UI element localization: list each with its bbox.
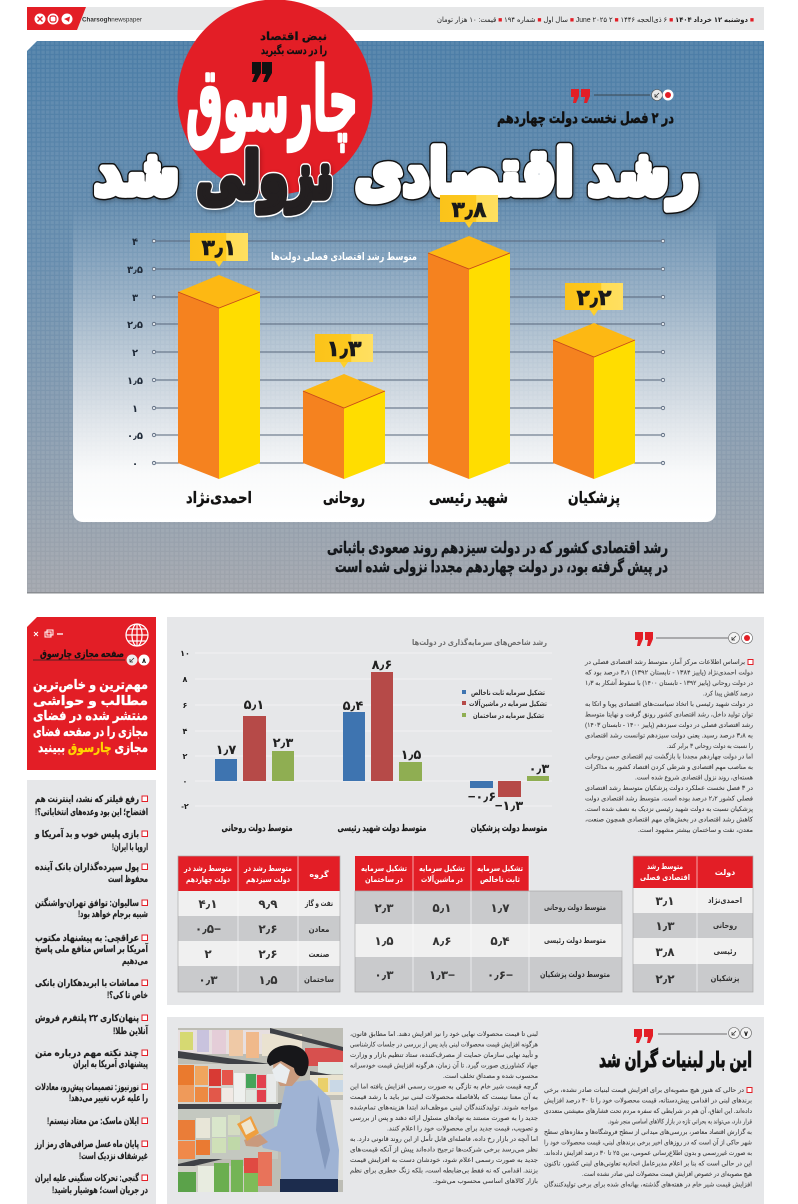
legend: تشکیل سرمایه در ساختمان (473, 712, 544, 720)
right shelf goods (310, 1075, 343, 1180)
article text: درصد کاهش پیدا کرد. (703, 690, 753, 698)
table: capital formation: ۲٫۳ (374, 901, 394, 915)
newspaper handle: Charsoghnewspaper (82, 16, 143, 24)
table: sector growth: ۰٫۵− (195, 922, 221, 936)
list items: نورنیوز: تصمیمات پیش‌رو، معادلات (35, 1082, 139, 1093)
list items: را علیه غرب تغییر می‌دهد! (69, 1093, 148, 1104)
logo quote marks (252, 62, 272, 82)
row three containers (178, 1109, 280, 1159)
bar: Rouhani: ۱٫۳ (326, 336, 362, 361)
bar: Rouhani (303, 334, 385, 507)
section marker (634, 1028, 752, 1043)
group: Pezeshkian: −۱٫۳ (495, 798, 523, 813)
table: sector growth: صنعت (308, 950, 330, 959)
article text: کاهش رشد اقتصادی در بخش‌های مهم اقتصادی همچون صنعت، (585, 816, 754, 824)
list bullets (142, 796, 148, 1180)
group: Raisi: ۸٫۶ (372, 657, 392, 672)
group: Rouhani: ۱٫۷ (216, 742, 236, 757)
chart axis: ۲ (132, 348, 138, 359)
middle column text: نظر می‌رسد برخی شرکت‌ها ترجیح داده‌اند پیش از آنکه قیمت‌های (350, 1144, 538, 1154)
chart axis: ۰ (132, 459, 138, 470)
article text: پزشکیان نسبت به دولت شهید رئیسی نزدیک به نصف شده است. (585, 806, 753, 813)
main headline: شد (94, 139, 179, 208)
right column text: هیچ مصوبه‌ای در خصوص افزایش قیمت محصولات لبنی صادر نشده است. (582, 1171, 752, 1178)
article text: اما در دولت چهاردهم مجددا با بازگشت تیم اقتصادی حسن روحانی (585, 752, 753, 760)
axis labels: ۱۰ (180, 649, 190, 658)
row two containers (178, 1064, 278, 1104)
main headline: رشد اقتصادی (355, 139, 699, 209)
middle column text: جهاد کشاورزی صورت گیرد. تا آن زمان، هرگونه افزایش قیمت خودسرانه (350, 1060, 538, 1070)
middle column text: لبنی تا قیمت محصولات نهایی خود را نیز افزایش دهند. اما مطابق قانون، (350, 1031, 538, 1038)
table: sector growth: ۲ (204, 947, 212, 961)
table: capital formation: تشکیل سرمایه (361, 864, 407, 873)
list items: محفوظ است (108, 874, 148, 885)
promo text: مجازی چارسوق ببینید (38, 740, 148, 755)
group: Raisi (338, 657, 426, 834)
list items: پیشنهادی آمریکا به ایران (73, 1057, 148, 1070)
list items: سالیوان: توافق تهران-واشنگتن (35, 897, 139, 909)
table: capital formation: ۵٫۴ (490, 934, 510, 948)
panel: news list (27, 780, 156, 1204)
article text: به ۳٫۸ درصد رسید. یعنی دولت سیزدهم توانست رشد اقتصادی (585, 732, 753, 740)
logo circle: چارسوق (186, 50, 358, 152)
right column text: این در حالی است که بنا بر اعلام مدیرعامل اتحادیه تعاونی‌های لبنی کشور، تاکنون (544, 1160, 752, 1168)
table: sector growth: دولت سیزدهم (246, 875, 290, 884)
middle column text: گرچه قیمت شیر خام به تازگی به صورت رسمی افزایش یافته اما این (350, 1082, 539, 1090)
axis labels: -۲ (181, 802, 189, 811)
table: capital formation: ۱٫۳− (429, 968, 455, 982)
axis labels: ۸ (183, 675, 188, 684)
slogan: را در دست بگیرید (261, 44, 327, 57)
legend: تشکیل سرمایه ثابت ناخالص (471, 689, 545, 697)
group: Rouhani: ۵٫۱ (244, 697, 264, 712)
list items: ایلان ماسک: من معتاد نیستم! (47, 1116, 139, 1127)
middle column text: و تصویب، قیمت جدید برای محصولات خود را اعلام کنند. (387, 1126, 538, 1132)
group: Raisi: متوسط دولت شهید رئیسی (338, 823, 426, 834)
table: quarterly growth: متوسط رشد (647, 862, 683, 871)
list items (34, 794, 149, 1196)
main headline: شد (94, 139, 179, 208)
promo text: منتشر شده در فضای (33, 708, 148, 723)
right column text: داده‌اند. این اتفاق، آن هم در شرایطی که سفره مردم تحت فشارهای معیشتی متعددی (544, 1106, 752, 1115)
right column text (544, 1087, 752, 1188)
logo circle (178, 0, 372, 194)
shelves (178, 1028, 343, 1170)
table: sector growth: دولت چهاردهم (186, 875, 230, 884)
list items: پایان ماه عسل صرافی‌های رمز ارز (34, 1139, 139, 1150)
panel: hero growth chart (27, 0, 764, 594)
main headline (94, 139, 699, 212)
middle column text: جدید را به صورت مستند به نهادهای مسئول ارائه دهند و پس از بررسی (350, 1115, 538, 1122)
chart axis: ۱٫۵ (127, 376, 143, 387)
article text (584, 657, 754, 834)
promo text: مطالب و حواشی (33, 693, 148, 708)
chart axis (127, 237, 665, 470)
list items: در جریان است؛ هوشیار باشید! (52, 1185, 148, 1196)
table: capital formation: در ماشین‌آلات (421, 874, 463, 884)
panel: red virtual page promo (27, 617, 156, 770)
man head (267, 1045, 309, 1086)
panel: investment analysis (167, 617, 764, 1005)
table: sector growth: ۲٫۶ (258, 922, 278, 936)
axis labels (180, 649, 190, 811)
table: capital formation: ۱٫۵ (374, 934, 394, 948)
photo: man reading a dairy product in a supermarket (178, 1028, 343, 1196)
table: sector growth: ۹٫۹ (258, 897, 278, 911)
section number (126, 654, 150, 666)
table: sector growth: گروه (309, 869, 329, 879)
slogan: نبض اقتصاد (260, 31, 327, 43)
right column text: قرار دارد، می‌تواند به بحرانی تازه در بازار کالاهای اساسی منجر شود. (608, 1118, 752, 1126)
middle column text: محسوب شده و مصداق تخلف است. (443, 1073, 538, 1080)
caption: در پیش گرفته بود، در دولت چهاردهم مجددا نزولی شده است (335, 557, 668, 577)
table: capital formation: تشکیل سرمایه (477, 864, 523, 873)
chart axis: ۳٫۵ (127, 265, 143, 276)
middle column text: مواجه شوند. تولیدکنندگان لبنی موظف‌اند ابتدا هزینه‌های تمام‌شده (350, 1104, 538, 1112)
article text: هسته‌ای، روند نزول اقتصادی شروع شده است. (635, 774, 754, 782)
chart axis: ۰٫۵ (127, 431, 143, 442)
article text: را نسبت به دولت روحانی ۳ برابر کند. (667, 743, 753, 750)
chart axis: ۲٫۵ (127, 320, 143, 331)
table: quarterly growth: رئیسی (714, 947, 737, 956)
middle column text: اما آنچه در بازار رخ داده، فاصله‌ای قابل تأمل از این روند قانونی دارد. به (350, 1134, 538, 1143)
caption (327, 540, 668, 577)
top bar (27, 7, 764, 30)
list items: اروپا با ایران! (112, 842, 148, 853)
list items: بازی پلیس خوب و بد آمریکا و (34, 827, 139, 840)
bar: Rouhani: روحانی (323, 490, 365, 507)
article text: دولت احمدی‌نژاد (پاییز ۱۳۸۴ - تابستان ۱۳۹۲) ۳٫۱ درصد بود که (585, 670, 753, 676)
table: quarterly growth: احمدی‌نژاد (708, 896, 742, 905)
bar: Pezeshkian: ۲٫۲ (576, 285, 612, 310)
row four containers (178, 1152, 272, 1196)
right column text: به گزارش اقتصاد معاصر، بررسی‌های میدانی از سطح فروشگاه‌ها و مغازه‌های سطح (544, 1128, 752, 1136)
table: quarterly growth: ۳٫۸ (655, 945, 675, 959)
table: capital formation: ۱٫۷ (490, 901, 510, 915)
slogan (260, 31, 327, 57)
bar: Ahmadinejad (178, 233, 260, 507)
group: Pezeshkian (468, 761, 549, 834)
group: Rouhani: ۲٫۳ (273, 735, 293, 750)
table: capital formation (355, 856, 622, 992)
axis labels: ۴ (183, 727, 188, 736)
list items: آمریکا بر اساس منافع ملی پاسخ (35, 942, 149, 955)
table: quarterly growth: روحانی (713, 921, 737, 930)
table: quarterly growth (633, 856, 753, 992)
list items: عراقچی: به پیشنهاد مکتوب (35, 933, 139, 944)
list items: مماشات با ابربدهکاران بانکی (35, 978, 139, 989)
middle column text: هرگونه افزایش قیمت محصولات لبنی باید پس از بررسی در جلسات کارشناسی (350, 1040, 539, 1048)
group: Rouhani: متوسط دولت روحانی (222, 823, 292, 834)
table: capital formation: ۸٫۶ (432, 934, 452, 948)
section marker (635, 632, 752, 646)
axis labels: ۲ (183, 752, 188, 761)
table: capital formation: متوسط دولت روحانی (544, 903, 606, 912)
table: sector growth: معادن (308, 925, 330, 934)
middle column text: به آن معنا نیست که بلافاصله محصولات لبنی نیز باید با رشد قیمت (350, 1092, 538, 1101)
table: capital formation: در ساختمان (365, 875, 403, 884)
list items: آنلاین طلا! (113, 1024, 149, 1037)
chart axis: ۱ (132, 404, 138, 415)
list items: گنجی: تحرکات سنگینی علیه ایران (35, 1172, 139, 1184)
table: quarterly growth: پزشکیان (710, 974, 740, 983)
right column text: در حالی که هنوز هیچ مصوبه‌ای برای افزایش قیمت لبنیات صادر نشده، برخی (544, 1087, 744, 1094)
list items: غیرشفاف نزدیک است! (79, 1151, 148, 1162)
date line: ■ دوشنبه ۱۲ خرداد ۱۴۰۴ ■ ۶ ذی‌الحجه ۱۴۴۶ ■ ۲ June ۲۰۲۵ ■ سال اول ■ شماره ۱۹۴ ■ قیمت: ۱۰ هزار تومان (437, 17, 754, 24)
upper shelf goods (178, 1030, 343, 1074)
chart axis: ۴ (132, 237, 138, 248)
kicker: در ۲ فصل نخست دولت چهاردهم (497, 110, 674, 128)
article text: براساس اطلاعات مرکز آمار، متوسط رشد اقتصادی فصلی در (584, 657, 745, 666)
main headline: نزولی (197, 142, 333, 212)
article text: در دولت شهید رئیسی با اتخاذ سیاست‌های اقتصادی پویا و اتکا به (585, 701, 753, 708)
list items: می‌دهیم (122, 956, 148, 967)
promo text (33, 677, 148, 755)
table: capital formation: ثابت ناخالص (480, 875, 520, 885)
middle column text: بزنند. اقدامی که نه فقط بی‌ضابطه است، بلکه زنگ خطری برای نظم (350, 1166, 538, 1174)
main headline: رشد اقتصادی (355, 139, 699, 209)
article text: توان تولید داخل، رشد اقتصادی کشور رونق گرفت و نهایتا متوسط (585, 710, 753, 718)
panel: dairy article (167, 1017, 764, 1204)
article text: در دولت روحانی (پاییز ۱۳۹۲ - تابستان ۱۴۰۰) با سقوط آشکار به ۱٫۳ (585, 678, 753, 687)
list items: شبیه برجام خواهد بود! (78, 909, 148, 920)
bar: Raisi: شهید رئیسی (429, 490, 508, 507)
table: sector growth: متوسط رشد در (243, 864, 292, 873)
table: sector growth: ۰٫۳ (198, 973, 218, 987)
table: sector growth (178, 856, 340, 992)
table: capital formation: متوسط دولت رئیسی (544, 936, 606, 945)
subtitle: متوسط رشد اقتصادی فصلی دولت‌ها (271, 251, 417, 263)
middle column text: و تأیید نهایی سازمان حمایت از مصرف‌کننده، ستاد تنظیم بازار و وزارت (350, 1050, 538, 1059)
axis labels: ۶ (183, 701, 188, 710)
right column text: افزایش قیمت شیر خام در هفته‌های گذشته، بهانه‌ای شده برای برخی تولیدکنندگان (544, 1180, 752, 1188)
man torso (258, 1080, 339, 1183)
middle column text (350, 1031, 539, 1185)
middle column text: جدید به صورت رسمی اعلام شود، خودشان دست به افزایش قیمت (350, 1157, 538, 1164)
article text: فصلی کشور ۲٫۲ درصد بوده است. متوسط رشد اقتصادی دولت (585, 796, 753, 802)
social icons (34, 14, 72, 24)
article text: در ۳ فصل نخست عملکرد دولت پزشکیان متوسط رشد اقتصادی (585, 785, 753, 792)
investment bar chart (180, 649, 552, 834)
main headline: نزولی (197, 142, 333, 212)
group: Raisi: ۱٫۵ (401, 747, 421, 762)
list items: پنهان‌کاری ۲۲ پلتفرم فروش (35, 1013, 139, 1024)
bar: Raisi: ۳٫۸ (451, 197, 487, 222)
right column text: برندهای لبنی در اقدامی پیش‌دستانه، قیمت محصولات خود را تا ۳۰ درصد افزایش (544, 1098, 752, 1104)
table: sector growth: ساختمان (304, 975, 334, 984)
list items: خاص تا کی؟! (107, 990, 148, 1001)
man trousers (280, 1179, 338, 1193)
list items: افتضاح؛ این بود وعده‌های انتخاباتی؟! (35, 807, 148, 818)
group: Rouhani (215, 697, 294, 834)
table: sector growth: نفت و گاز (304, 898, 333, 908)
table: capital formation: تشکیل سرمایه (419, 864, 465, 873)
group: Raisi: ۵٫۴ (343, 698, 363, 713)
legend (462, 689, 547, 720)
table: quarterly growth: اقتصادی فصلی (640, 873, 690, 882)
middle column text: بازار کالاهای اساسی محسوب می‌شود. (433, 1178, 538, 1185)
group: Pezeshkian: −۰٫۶ (468, 789, 496, 804)
promo title: صفحه مجازی چارسوق (40, 649, 124, 660)
right column text: شهر حاکی از آن است که در روزهای اخیر برخی برندهای لبنی، قیمت محصولات خود را (544, 1138, 752, 1146)
section marker (571, 89, 674, 103)
table: sector growth: ۲٫۶ (258, 947, 278, 961)
table: sector growth: متوسط رشد در (183, 864, 232, 873)
bar: Ahmadinejad: احمدی‌نژاد (186, 490, 252, 507)
list items: چند نکته مهم درباره متن (35, 1048, 139, 1059)
table: capital formation: متوسط دولت پزشکیان (540, 970, 610, 979)
chart axis: ۳ (132, 293, 138, 304)
section marker: ۷ (744, 1031, 749, 1038)
article text: معدن، نفت و ساختمان بیشتر مشهود است. (638, 827, 753, 834)
legend: تشکیل سرمایه در ماشین‌آلات (469, 699, 547, 708)
table: sector growth: ۱٫۵ (258, 973, 278, 987)
axis labels: ۰ (183, 777, 187, 786)
promo text: مهم‌ترین و خاص‌ترین (33, 677, 148, 692)
red social tab (27, 7, 86, 30)
table: sector growth: ۴٫۱ (198, 897, 218, 911)
caption: رشد اقتصادی کشور که در دولت سیزدهم روند صعودی باثباتی (327, 540, 668, 557)
table: quarterly growth: دولت (715, 868, 735, 877)
group: Pezeshkian: متوسط دولت پزشکیان (470, 823, 548, 834)
man hand and product (237, 1116, 268, 1147)
table: quarterly growth: ۲٫۲ (655, 972, 675, 986)
article text: رشد اقتصادی فصلی در دولت سیزدهم (پاییز ۱۴۰۰ - تابستان ۱۴۰۳) (585, 722, 753, 729)
group: Pezeshkian: ۰٫۳ (529, 761, 549, 776)
icon: globe (126, 624, 148, 646)
table: quarterly growth: ۱٫۳ (655, 919, 675, 933)
list items: پول سپرده‌گذاران بانک آینده (35, 860, 139, 873)
table: capital formation: ۵٫۱ (432, 901, 452, 915)
icon: window controls (34, 630, 63, 637)
promo text: مجازی را در صفحه فضای (33, 724, 148, 739)
bar: Ahmadinejad: ۳٫۱ (201, 235, 237, 260)
bar: Pezeshkian: پزشکیان (568, 490, 620, 508)
bar: Pezeshkian (553, 283, 635, 508)
list items: رفع فیلتر که نشد، اینترنت هم (35, 794, 139, 805)
right column text: به صورت غیررسمی و بدون اطلاع‌رسانی عمومی، بین ۲۵ تا ۳۰ درصد افزایش داده‌اند. (544, 1150, 752, 1157)
section number: ۸ (142, 658, 147, 665)
table: quarterly growth: ۳٫۱ (655, 894, 675, 908)
article text: به مناصب مهم اقتصادی و شرطی کردن اقتصاد کشور به مذاکرات (585, 764, 753, 771)
table: capital formation: ۰٫۳ (374, 968, 394, 982)
bar: Raisi (428, 195, 510, 507)
table: capital formation: ۰٫۶− (487, 968, 513, 982)
chart title: رشد شاخص‌های سرمایه‌گذاری در دولت‌ها (412, 637, 547, 648)
